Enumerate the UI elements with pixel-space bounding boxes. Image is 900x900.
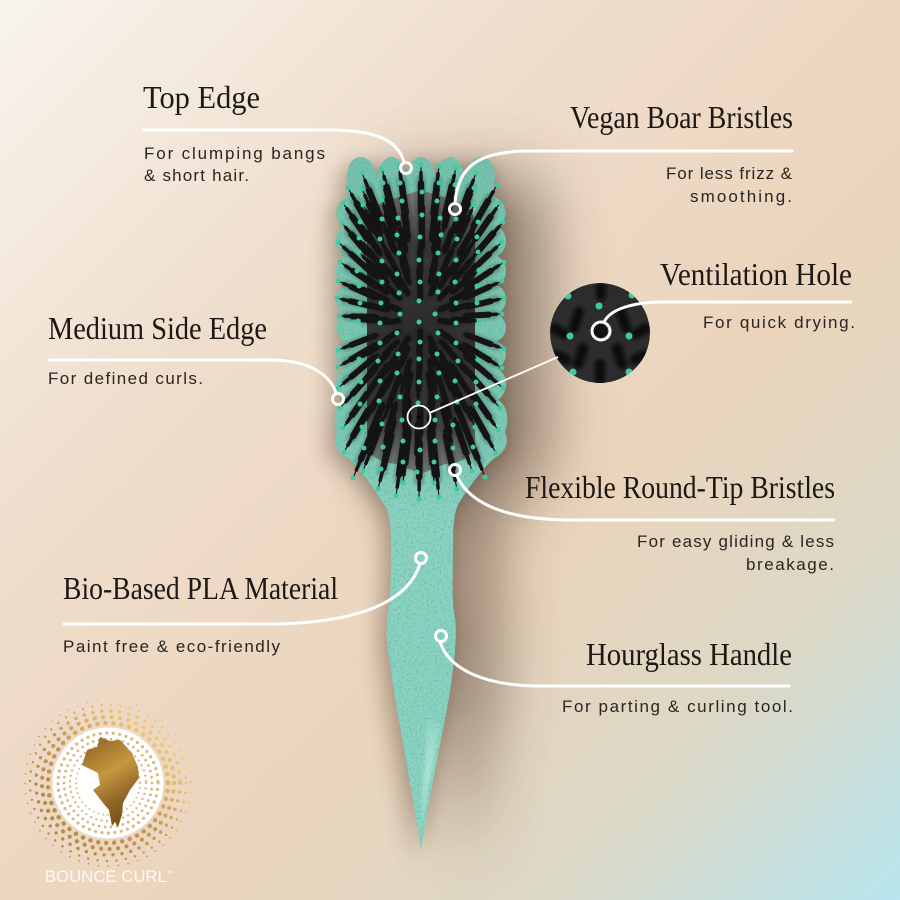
bristles	[337, 165, 504, 499]
description: Paint free & eco-friendly	[63, 637, 280, 656]
description	[144, 144, 325, 185]
heading: Hourglass Handle	[586, 636, 792, 672]
description: For quick drying.	[703, 313, 855, 332]
bristle tips	[337, 165, 504, 499]
description: For less frizz &	[666, 164, 793, 183]
callout: flexible round-tip bristles	[450, 464, 835, 574]
ventilation hole magnifier	[408, 283, 650, 428]
connector	[450, 464, 834, 520]
connector	[592, 302, 851, 340]
logo: Bounce Curl	[25, 700, 191, 886]
callout: bio-based PLA material	[63, 552, 426, 656]
description: smoothing.	[690, 187, 792, 206]
ventilation hole	[593, 324, 607, 338]
zoomed bristle detail	[550, 283, 650, 385]
heading: Vegan Boar Bristles	[570, 99, 793, 135]
callout: hourglass handle	[436, 630, 793, 716]
connector	[144, 130, 412, 174]
description: For defined curls.	[48, 369, 203, 388]
connector	[450, 151, 792, 214]
side bristle tufts	[337, 235, 504, 427]
wordmark: ™	[167, 870, 173, 877]
description: For easy gliding & less	[637, 532, 834, 551]
heading: Medium Side Edge	[48, 310, 267, 346]
long bristle tufts	[342, 165, 503, 499]
callout: vegan boar bristles	[450, 99, 793, 214]
connector	[64, 552, 426, 624]
callout: ventilation hole	[592, 256, 855, 340]
brush body and handle	[335, 157, 507, 852]
small marker on brush	[408, 406, 430, 428]
description	[666, 164, 793, 206]
description: For clumping bangs	[144, 144, 325, 163]
heading: Flexible Round-Tip Bristles	[525, 469, 835, 505]
handle highlight	[420, 720, 440, 840]
gold dot rings	[25, 700, 191, 866]
heading: Bio-Based PLA Material	[63, 570, 338, 606]
heading: Top Edge	[143, 79, 260, 115]
connector	[436, 630, 789, 686]
description: For parting & curling tool.	[562, 697, 793, 716]
callout: medium side edge	[48, 310, 344, 404]
description: & short hair.	[144, 166, 249, 185]
hair silhouette	[82, 737, 139, 827]
inner dot rings	[58, 733, 158, 833]
brush shadow	[323, 161, 549, 866]
description	[637, 532, 834, 574]
heading: Ventilation Hole	[660, 256, 852, 292]
wordmark: BOUNCE CURL	[45, 868, 167, 886]
white disc	[52, 728, 164, 838]
connector	[49, 360, 344, 404]
pointer line to hole on brush	[430, 357, 558, 412]
bristle bed	[367, 190, 475, 474]
callout: top edge	[143, 79, 412, 185]
description: breakage.	[746, 555, 834, 574]
brush illustration	[335, 157, 507, 852]
